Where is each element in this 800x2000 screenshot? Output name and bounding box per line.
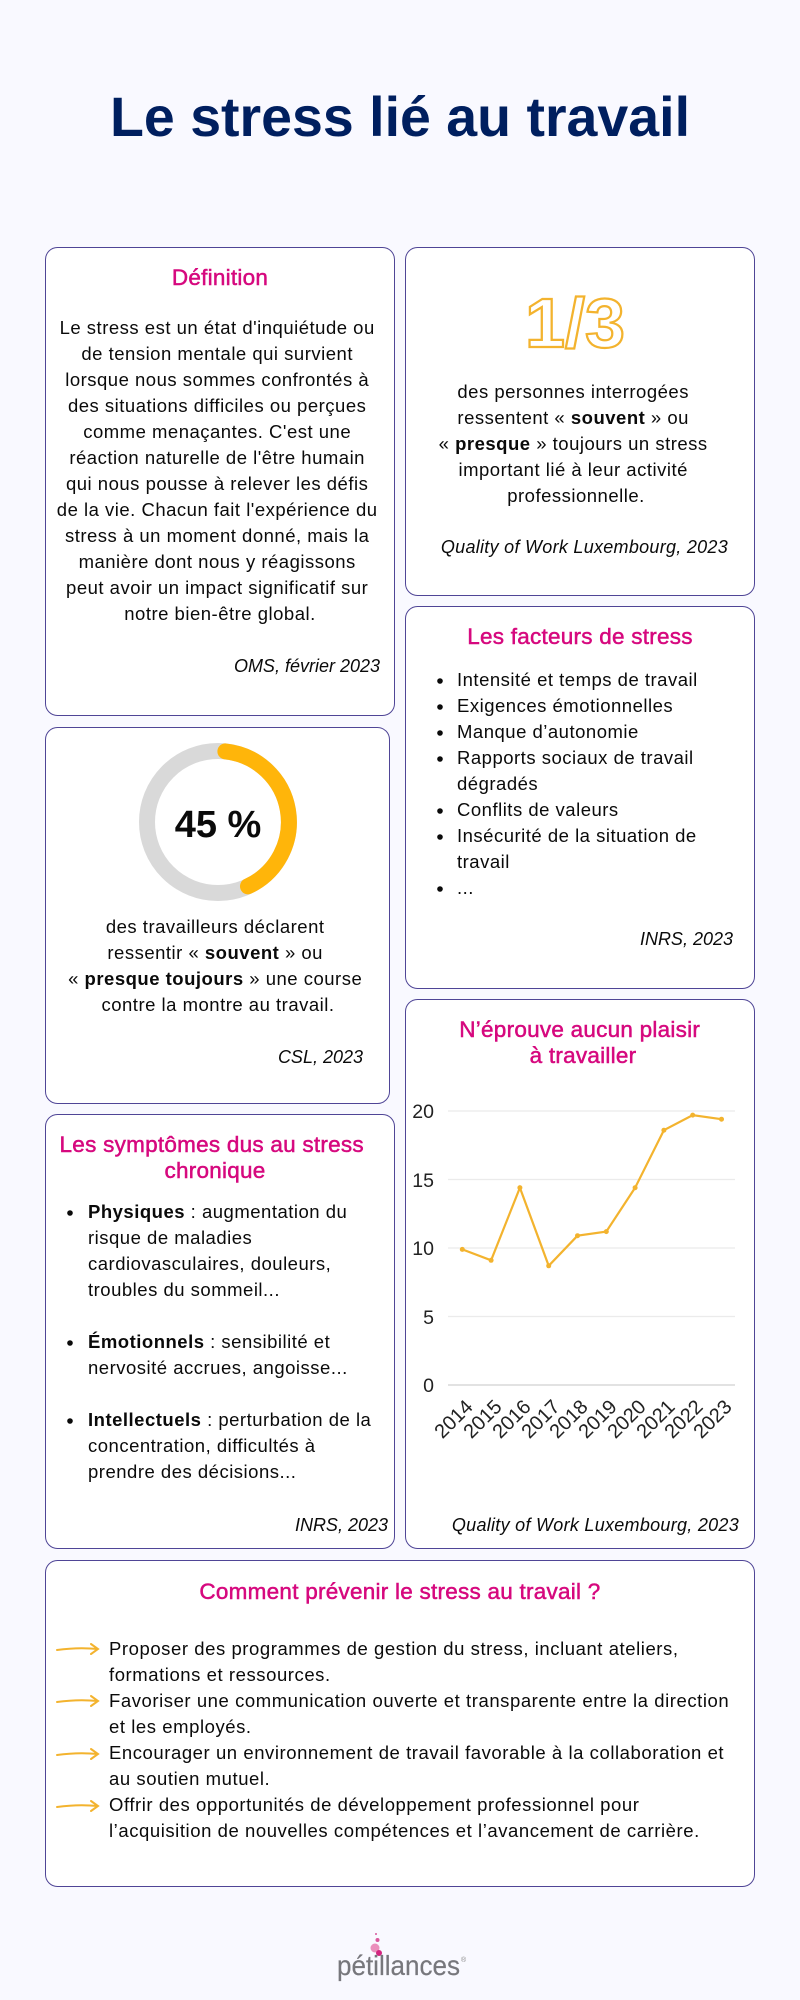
heading: symptômes: Les symptômes dus au stress: [60, 1132, 364, 1157]
donut chart: 45 %: [175, 804, 261, 846]
line chart: 20: [412, 1101, 434, 1123]
definition text: lorsque nous sommes confrontés à: [65, 369, 369, 390]
source: Quality of Work Luxembourg, 2023: [452, 1515, 739, 1535]
source: OMS, février 2023: [234, 656, 380, 676]
source: INRS, 2023: [640, 929, 733, 949]
statistic text: ressentent « souvent » ou: [457, 407, 689, 428]
definition text: de la vie. Chacun fait l'expérience du: [57, 499, 378, 520]
heading: facteurs: Les facteurs de stress: [467, 624, 693, 649]
list: symptômes: Intellectuels : perturbation de la: [88, 1409, 371, 1430]
heading: définition: Définition: [172, 265, 268, 290]
list: symptômes: cardiovasculaires, douleurs,: [88, 1253, 331, 1274]
definition text: stress à un moment donné, mais la: [65, 525, 370, 546]
line chart: 2016: [489, 1396, 536, 1443]
list: facteurs: dégradés: [457, 773, 538, 794]
list: symptômes: risque de maladies: [88, 1227, 252, 1248]
statistic text: professionnelle.: [507, 485, 645, 506]
line chart: 2017: [518, 1396, 565, 1443]
heading: prévention: Comment prévenir le stress au travail ?: [199, 1579, 601, 1604]
definition text: peut avoir un impact significatif sur: [66, 577, 368, 598]
definition text: manière dont nous y réagissons: [79, 551, 356, 572]
prevention list: Encourager un environnement de travail favorable à la collaboration et: [109, 1742, 724, 1763]
line chart: 0: [423, 1375, 434, 1397]
source: CSL, 2023: [278, 1047, 363, 1067]
panel: symptômes: [46, 1114, 394, 1548]
list: facteurs: Exigences émotionnelles: [457, 695, 673, 716]
definition text: qui nous pousse à relever les défis: [66, 473, 368, 494]
list: facteurs: [437, 669, 703, 898]
line chart: 2019: [575, 1396, 622, 1443]
line chart: 2014: [431, 1396, 478, 1443]
prevention list: formations et ressources.: [109, 1664, 331, 1685]
statistic text: contre la montre au travail.: [101, 994, 335, 1015]
list: symptômes: prendre des décisions...: [88, 1461, 296, 1482]
logo: pétillances: pétillances: [337, 1950, 460, 1981]
list: symptômes: nervosité accrues, angoisse...: [88, 1357, 348, 1378]
source: INRS, 2023: [295, 1515, 388, 1535]
line chart: 2021: [633, 1396, 680, 1443]
heading: chart: à travailler: [530, 1043, 637, 1068]
prevention list: l’acquisition de nouvelles compétences et l’avancement de carrière.: [109, 1820, 700, 1841]
definition text: comme menaçantes. C'est une: [83, 421, 351, 442]
list: symptômes: [67, 1201, 377, 1482]
list: symptômes: concentration, difficultés à: [88, 1435, 316, 1456]
definition text: de tension mentale qui survient: [81, 343, 353, 364]
statistic text: « presque toujours » une course: [68, 968, 362, 989]
statistic text: « presque » toujours un stress: [439, 433, 708, 454]
definition text: réaction naturelle de l'être humain: [69, 447, 365, 468]
prevention list: au soutien mutuel.: [109, 1768, 270, 1789]
prevention list: Offrir des opportunités de développement professionnel pour: [109, 1794, 639, 1815]
statistic text: des travailleurs déclarent: [106, 916, 325, 937]
panel: 45 % statistic: [46, 728, 390, 1104]
list: symptômes: Émotionnels : sensibilité et: [88, 1331, 330, 1352]
heading: chart: N’éprouve aucun plaisir: [459, 1017, 700, 1042]
statistic text: important lié à leur activité: [458, 459, 688, 480]
line chart: 2018: [546, 1396, 593, 1443]
panel: facteurs de stress: [406, 606, 754, 988]
prevention list: et les employés.: [109, 1716, 252, 1737]
donut chart: [147, 751, 289, 893]
line chart: 10: [412, 1238, 434, 1260]
list: facteurs: ...: [457, 877, 474, 898]
list: symptômes: troubles du sommeil...: [88, 1279, 280, 1300]
statistic text: des personnes interrogées: [457, 381, 689, 402]
icon: arrows: [57, 1644, 98, 1811]
panel: line chart: [406, 1000, 754, 1548]
panel: 1/3 statistic: [406, 248, 754, 596]
line chart: 2015: [460, 1396, 507, 1443]
list: facteurs: Insécurité de la situation de: [457, 825, 697, 846]
list: facteurs: Manque d’autonomie: [457, 721, 639, 742]
prevention list: Proposer des programmes de gestion du stress, incluant ateliers,: [109, 1638, 679, 1659]
list: symptômes: Physiques : augmentation du: [88, 1201, 347, 1222]
line chart: 2023: [690, 1396, 737, 1443]
list: facteurs: Conflits de valeurs: [457, 799, 619, 820]
definition text: notre bien-être global.: [124, 603, 316, 624]
panel: prévention: [46, 1560, 754, 1886]
big number 1/3: 1/3: [525, 284, 625, 362]
list: facteurs: travail: [457, 851, 510, 872]
list: facteurs: Intensité et temps de travail: [457, 669, 698, 690]
list: facteurs: Rapports sociaux de travail: [457, 747, 694, 768]
title: Le stress lié au travail: [110, 86, 690, 148]
logo: pétillances: [337, 1933, 467, 1981]
logo: pétillances: ®: [461, 1956, 467, 1964]
line chart: 15: [412, 1170, 434, 1192]
panel: définition: [46, 248, 394, 716]
line chart: 5: [423, 1307, 434, 1329]
definition text: des situations difficiles ou perçues: [68, 395, 366, 416]
line chart: [412, 1101, 737, 1443]
heading: symptômes: chronique: [164, 1158, 266, 1183]
statistic text: ressentir « souvent » ou: [107, 942, 323, 963]
source: Quality of Work Luxembourg, 2023: [441, 537, 728, 557]
line chart: 2022: [661, 1396, 708, 1443]
definition text: Le stress est un état d'inquiétude ou: [60, 317, 375, 338]
prevention list: Favoriser une communication ouverte et transparente entre la direction: [109, 1690, 729, 1711]
line chart: 2020: [604, 1396, 651, 1443]
